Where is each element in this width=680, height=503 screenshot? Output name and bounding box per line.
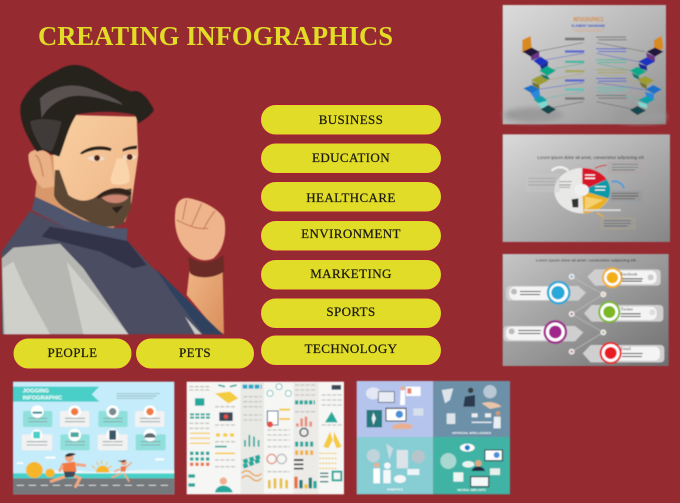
panel: isometric infographic thumbnail: ELEMENT DIAGRAMS — [572, 24, 606, 28]
pill: people: PEOPLE — [47, 345, 98, 360]
pill: technology: TECHNOLOGY — [305, 341, 398, 356]
panel: isometric infographic thumbnail — [503, 5, 667, 124]
category pills — [13, 104, 442, 369]
pill: business: BUSINESS — [319, 112, 383, 127]
step cards — [587, 269, 661, 286]
panel: jogging infographic thumbnail: JOGGING — [23, 388, 50, 394]
tile icons — [31, 405, 44, 418]
quadrant: top left — [357, 381, 433, 437]
info tiles — [23, 411, 52, 427]
pill: marketing: MARKETING — [310, 266, 392, 281]
pill: sports — [260, 298, 442, 328]
sun — [96, 466, 109, 472]
quadrant: bottom right — [433, 437, 510, 494]
pill: pets — [136, 338, 254, 369]
bars column 5 — [295, 396, 315, 408]
card text: Facebook — [621, 272, 638, 277]
hair side grey — [30, 119, 62, 152]
quadrant: top right: ARTIFICIAL INTELLIGENCE — [452, 431, 491, 435]
vest dark band — [42, 227, 147, 268]
pill: environment — [260, 220, 442, 251]
ground — [13, 473, 174, 478]
quadrant: bottom left — [357, 437, 433, 494]
pill: sports: SPORTS — [326, 304, 376, 319]
bars column 3 — [243, 381, 262, 393]
sleeve highlight — [3, 262, 128, 334]
map — [215, 392, 238, 403]
finger lines — [177, 200, 215, 229]
eyes — [87, 154, 137, 161]
beard — [54, 170, 132, 227]
neck — [35, 155, 130, 228]
pie labels — [559, 182, 572, 187]
card text: Twitter — [621, 306, 634, 311]
panel: medical infographic thumbnail — [187, 382, 344, 494]
fist — [175, 198, 225, 260]
banner — [13, 387, 99, 402]
panel: technology infographic thumbnail — [357, 381, 510, 494]
teal icon — [195, 398, 204, 406]
side icons — [511, 289, 517, 295]
panel: jogging infographic thumbnail: INFOGRAPHIC — [23, 395, 62, 401]
callouts — [595, 165, 607, 168]
watch — [188, 255, 224, 277]
grey sliver — [185, 317, 202, 334]
panel: connected steps thumbnail: Lorem ipsum dolor sit amet, consectetur adipiscing elit — [536, 258, 636, 262]
pill: people — [13, 338, 132, 369]
collar — [32, 197, 128, 241]
photo: man with raised fist — [2, 65, 225, 334]
arm and wrist — [187, 268, 224, 334]
grey sleeve — [2, 244, 128, 334]
quadrant: bottom left: ROBOTICS — [387, 487, 403, 491]
pill: marketing — [260, 260, 442, 290]
doctor — [215, 486, 233, 492]
faint text lines — [189, 385, 342, 472]
runner woman — [121, 460, 127, 466]
blue lining — [155, 268, 223, 334]
clouds — [45, 457, 56, 459]
hair — [20, 65, 154, 157]
monitor — [219, 412, 233, 421]
clipboard — [267, 411, 278, 425]
text rows — [565, 37, 627, 100]
pill: environment: ENVIRONMENT — [301, 226, 401, 241]
right stair blocks — [654, 36, 663, 53]
ear — [28, 150, 55, 188]
pill: healthcare: HEALTHCARE — [306, 190, 396, 205]
panel: jogging infographic thumbnail — [13, 382, 174, 494]
lips — [102, 195, 128, 203]
runner man — [65, 453, 74, 462]
hair highlight — [40, 85, 123, 118]
quadrant: top right — [433, 381, 510, 437]
step rings — [603, 268, 622, 287]
quadrant: bottom right: NEURAL IMPLANTS — [457, 488, 486, 492]
vest — [2, 211, 223, 334]
node dots — [570, 275, 605, 354]
eyebrows — [80, 146, 137, 154]
pyramid and lungs — [325, 412, 338, 422]
title: CREATING INFOGRAPHICS — [38, 20, 393, 51]
moustache — [97, 188, 132, 199]
pill: education: EDUCATION — [312, 150, 390, 165]
pill: technology — [260, 335, 442, 366]
chin tuft — [112, 206, 123, 213]
pill: pets: PETS — [179, 345, 211, 360]
heading: INFOGRAPHICS — [573, 16, 604, 23]
panel: connected steps thumbnail — [503, 254, 669, 366]
pill: business — [260, 104, 442, 135]
trees — [26, 462, 43, 478]
card text — [518, 272, 643, 357]
pill: healthcare — [260, 182, 442, 212]
nose — [111, 158, 130, 185]
connector lines — [537, 43, 647, 109]
pill: education — [260, 143, 442, 174]
left stair blocks — [522, 36, 532, 53]
panel: pie diagram thumbnail — [503, 134, 670, 242]
panel: pie diagram thumbnail: Lorem ipsum dolor sit amet, consectetur adipiscing elit — [537, 155, 645, 160]
pie segments — [554, 168, 610, 213]
face — [53, 115, 138, 227]
card text: Email — [621, 346, 632, 351]
